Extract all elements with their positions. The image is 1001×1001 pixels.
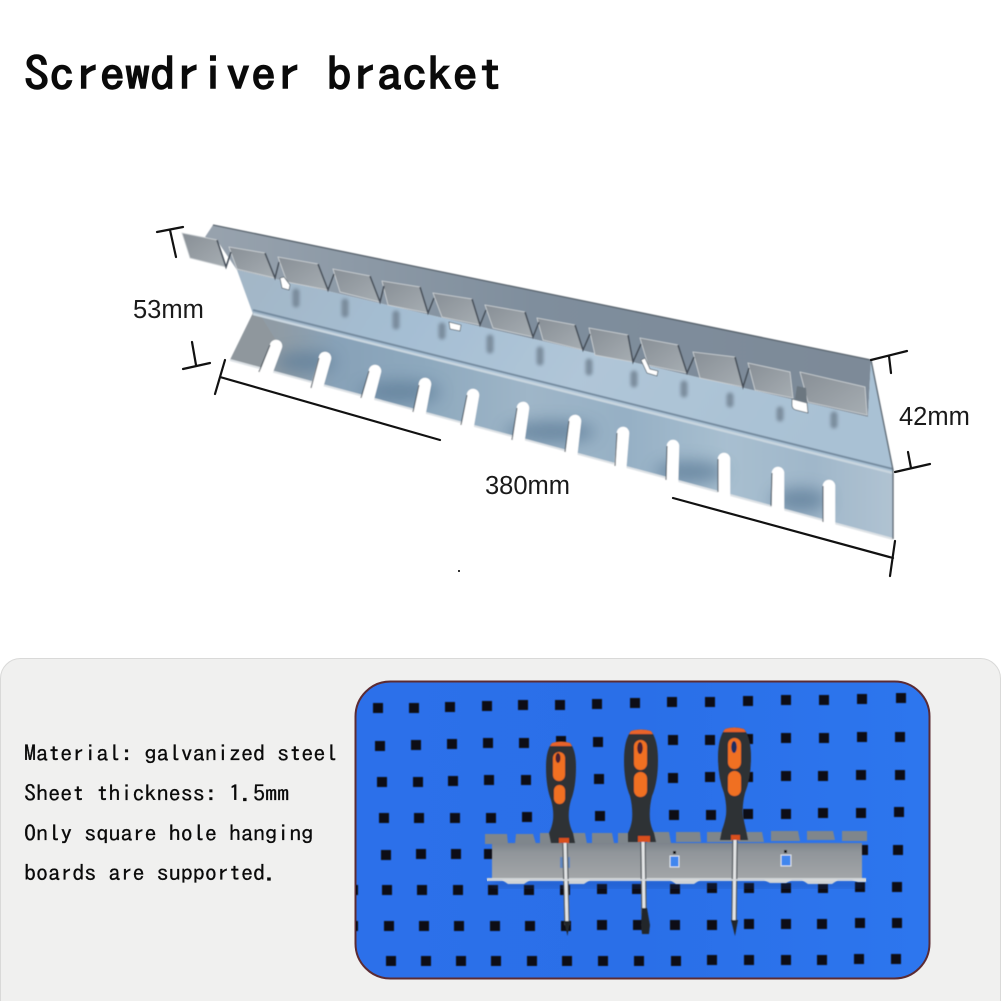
keyhole tab — [795, 386, 807, 402]
screwdriver 2 — [624, 730, 658, 934]
bracket product photo — [182, 225, 893, 539]
dimension: 53mm bottom — [183, 342, 210, 369]
back wall of bracket — [205, 225, 871, 417]
lower face of bracket with slots — [230, 313, 893, 539]
upper face of bracket — [237, 270, 893, 473]
shaft — [643, 842, 644, 915]
right edge — [871, 360, 893, 539]
photo: pegboard with screwdrivers — [352, 682, 930, 978]
screwdriver 1 — [546, 742, 576, 936]
metal rack — [485, 831, 867, 884]
left cutout behind shaft — [560, 857, 570, 868]
keyhole cutouts — [280, 277, 808, 413]
rack square cutouts — [670, 855, 791, 867]
title: Screwdriver bracket — [24, 50, 503, 96]
shaft crossing highlight — [487, 879, 866, 881]
support line 1: Only square hole hanging — [24, 822, 313, 844]
shaft — [734, 840, 735, 922]
rack dots — [673, 850, 787, 854]
panel: details — [0, 658, 1000, 1001]
dimension: 380mm left — [215, 360, 440, 440]
shaft — [565, 842, 567, 925]
dimension: 42mm bottom — [895, 452, 930, 472]
dimension: 53mm top — [157, 227, 183, 257]
material line: Material: galvanized steel — [24, 742, 337, 764]
dimension: 380mm right — [673, 498, 895, 576]
dimension marks — [157, 227, 930, 576]
handle — [718, 728, 751, 840]
handle — [546, 742, 576, 843]
speck — [458, 570, 460, 572]
handle — [624, 730, 658, 842]
notches between tabs — [217, 240, 749, 387]
support line 2: boards are supported. — [24, 861, 277, 883]
specification text — [24, 742, 337, 883]
screwdriver 3 — [718, 728, 751, 936]
thickness line: Sheet thickness: 1.5mm — [24, 782, 289, 804]
label: 42mm: 42mm — [899, 403, 970, 431]
rack lower lip — [487, 878, 866, 884]
blue pegboard — [356, 682, 930, 978]
rack tabs — [485, 831, 867, 844]
square holes — [352, 698, 906, 961]
fold line — [253, 310, 893, 469]
label: 53mm: 53mm — [133, 296, 204, 324]
label: 380mm: 380mm — [485, 472, 570, 500]
hanger shadows — [296, 292, 834, 425]
hanger tabs — [182, 233, 867, 415]
dimension: 42mm top — [871, 351, 907, 373]
rack shadow — [492, 880, 864, 888]
